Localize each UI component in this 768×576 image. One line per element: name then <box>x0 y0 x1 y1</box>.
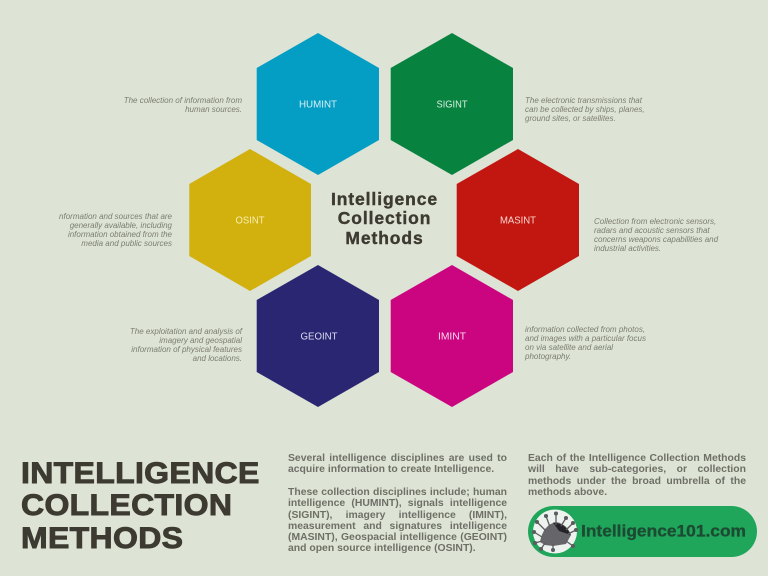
hexagon: HUMINT: HUMINT <box>299 100 338 111</box>
description: GEOINT: information of physical features <box>131 345 242 354</box>
description: GEOINT <box>130 327 243 363</box>
icon: virus <box>533 510 577 554</box>
center heading: Intelligence <box>331 188 438 208</box>
description: MASINT: industrial activities. <box>594 244 661 252</box>
description: GEOINT: The exploitation and analysis of <box>130 327 242 336</box>
main title: COLLECTION <box>20 489 232 522</box>
center heading: Methods <box>345 228 424 248</box>
description: IMINT: information collected from photos, <box>525 325 645 334</box>
center heading: Collection <box>338 208 431 228</box>
description: OSINT <box>59 212 172 248</box>
description: IMINT: on via satellite and aerial <box>525 343 613 352</box>
body text: disciplines list: These collection disciplines include; human <box>288 487 507 498</box>
body text: sub-categories: will have sub-categories, or collection <box>528 464 746 475</box>
body text: disciplines intro: acquire information to create Intelligence. <box>288 464 494 475</box>
hexagon: MASINT: MASINT <box>500 216 537 227</box>
body text: sub-categories: methods above. <box>528 487 607 498</box>
main title: INTELLIGENCE <box>20 456 259 490</box>
main title: METHODS <box>20 522 183 554</box>
body text: disciplines intro: Several intelligence disciplines are used to <box>288 453 507 464</box>
description: MASINT <box>594 216 718 252</box>
body text: disciplines intro <box>288 453 507 475</box>
description: GEOINT: imagery and geospatial <box>159 336 242 345</box>
hexagon: MASINT <box>457 149 579 291</box>
body text: disciplines list: intelligence (HUMINT), signals intelligence <box>288 498 507 509</box>
body text: sub-categories <box>528 453 746 498</box>
description: OSINT: information obtained from the <box>68 230 172 239</box>
description: OSINT: nformation and sources that are <box>59 212 172 221</box>
body text: disciplines list: (SIGINT), imagery intelligence (IMINT), <box>288 510 507 521</box>
description: IMINT <box>524 325 646 361</box>
hexagon: GEOINT: GEOINT <box>300 332 338 342</box>
hexagon: OSINT: OSINT <box>236 216 265 227</box>
body text: disciplines list <box>288 487 507 554</box>
hexagon: SIGINT <box>391 33 513 175</box>
description: SIGINT: The electronic transmissions that <box>525 96 642 105</box>
description: OSINT: media and public sources <box>81 239 172 248</box>
body text: sub-categories: Each of the Intelligence Collection Methods <box>528 453 746 464</box>
body text: disciplines list: and open source intelligence (OSINT). <box>288 543 476 554</box>
main title <box>20 456 259 554</box>
description: HUMINT: human sources. <box>185 105 242 114</box>
logo text: Intelligence101.com <box>581 522 746 540</box>
description: HUMINT <box>124 96 242 114</box>
description: GEOINT: and locations. <box>193 354 242 363</box>
description: SIGINT: can be collected by ships, planes, <box>525 105 645 114</box>
body text: disciplines list: measurement and signatures intelligence <box>288 521 507 532</box>
body text: sub-categories: methods under the broad umbrella of the <box>528 476 746 487</box>
hexagon: OSINT <box>189 149 311 291</box>
hexagon: HUMINT <box>257 33 379 175</box>
hexagon: IMINT: IMINT <box>438 332 467 342</box>
description: SIGINT: ground sites, or satellites. <box>525 114 616 123</box>
center heading <box>331 188 438 248</box>
description: IMINT: photography. <box>525 352 571 361</box>
hexagon: GEOINT <box>257 265 379 407</box>
hexagon: IMINT <box>391 265 513 407</box>
description: MASINT: Collection from electronic sensors, <box>594 216 716 226</box>
hexagon: SIGINT: SIGINT <box>436 100 468 111</box>
description: IMINT: and images with a particular focus <box>525 334 646 343</box>
description: MASINT: radars and acoustic sensors that <box>594 226 710 234</box>
description: HUMINT: The collection of information from <box>124 96 242 105</box>
description: SIGINT <box>525 96 645 123</box>
body text: disciplines list: (MASINT), Geospacial intelligence (GEOINT) <box>288 532 507 543</box>
description: OSINT: generally available, including <box>70 221 172 230</box>
description: MASINT: concerns weapons capabilities and <box>594 234 718 244</box>
